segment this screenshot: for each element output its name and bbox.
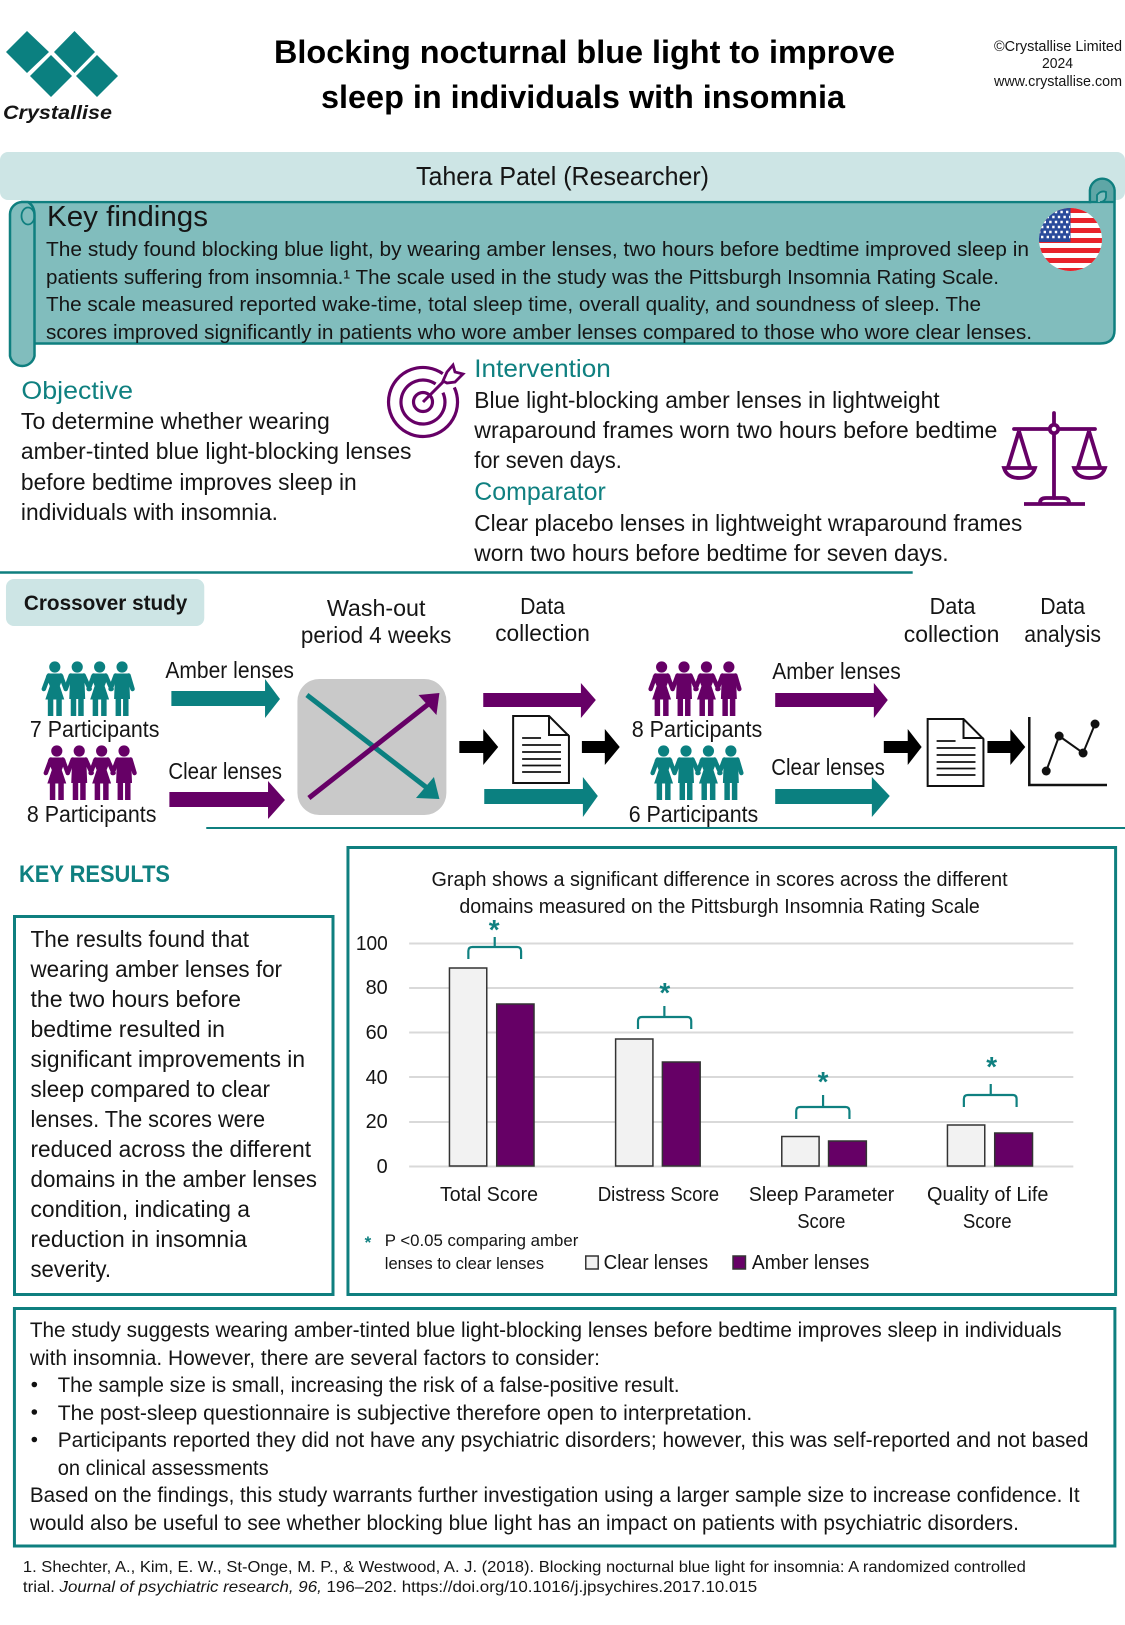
label: data collection 2	[904, 593, 999, 647]
intervention text: for seven days.	[474, 447, 622, 473]
group: 6 participants	[629, 745, 758, 827]
label: wash-out period	[301, 595, 451, 648]
arrow: black 2	[582, 729, 620, 765]
title: Blocking nocturnal blue light to improve	[274, 34, 895, 70]
arrow: purple clear start	[169, 781, 285, 819]
chart title: domains measured on the Pittsburgh Insomnia Rating Scale	[459, 895, 980, 918]
logo diamonds	[6, 31, 118, 97]
heading: key results: KEY RESULTS	[19, 861, 170, 888]
significance note: lenses to clear lenses	[385, 1254, 544, 1273]
bars: sleep parameter score	[782, 1136, 866, 1166]
label: wash-out period: Wash-out	[327, 595, 426, 621]
copyright note: www.crystallise.com	[993, 74, 1122, 90]
objective heading: Objective	[21, 377, 133, 405]
reference: 1. Shechter, A., Kim, E. W., St-Onge, M. P., & Westwood, A. J. (2018). Blocking nocturnal blue light for insomnia: A randomized controlled	[23, 1559, 1026, 1576]
significance bracket: sleep parameter score	[796, 1066, 849, 1119]
category labels: Sleep Parameter	[749, 1183, 894, 1206]
panel: conclusion: Based on the findings, this study warrants further investigation using a larger sample size to increase confidence. It	[30, 1484, 1080, 1507]
objective text: before bedtime improves sleep in	[21, 469, 357, 495]
arrow: black 4	[987, 729, 1025, 765]
icon: US flag	[1038, 207, 1104, 273]
panel: conclusion: Participants reported they did not have any psychiatric disorders; however, this was self-reported and not based	[58, 1429, 1089, 1452]
title: sleep in individuals with insomnia	[321, 79, 845, 115]
copyright note: 2024	[1042, 56, 1073, 72]
category labels: Total Score	[440, 1183, 538, 1206]
icon: document 1	[513, 716, 569, 783]
panel: conclusion: The post-sleep questionnaire is subjective therefore open to interpretation.	[58, 1402, 752, 1425]
comparator text	[473, 510, 1022, 566]
icon: document 2	[928, 719, 983, 786]
panel: conclusion	[14, 1308, 1115, 1546]
label: data collection 1: Data	[520, 593, 565, 619]
panel: key results text: lenses. The scores were	[30, 1106, 265, 1132]
category labels: Quality of Life	[927, 1183, 1048, 1206]
key findings heading: Key findings	[47, 201, 208, 233]
key findings text: The study found blocking blue light, by wearing amber lenses, two hours before bedtime improved sleep in	[46, 238, 1029, 261]
category labels: Distress Score	[598, 1183, 719, 1206]
crossover box	[297, 679, 446, 815]
label: data collection 1: collection	[495, 620, 590, 646]
icon: balance scales	[1004, 413, 1105, 504]
icon: line chart	[1029, 717, 1107, 785]
label: data collection 2: collection	[904, 621, 999, 647]
significance note	[365, 1231, 579, 1273]
scroll left curl	[22, 208, 34, 224]
label: data analysis	[1024, 593, 1101, 647]
panel: key results text: reduction in insomnia	[30, 1226, 247, 1252]
panel: key results text: significant improvements in	[30, 1046, 305, 1072]
key findings text: patients suffering from insomnia.¹ The scale used in the study was the Pittsburgh Insomnia Rating Scale.	[46, 266, 999, 289]
category labels: Score	[797, 1210, 845, 1233]
icon: target with arrow	[389, 365, 463, 436]
scroll body	[22, 179, 1114, 344]
significance note: *	[365, 1233, 372, 1252]
significance bracket: sleep parameter score: *	[818, 1066, 829, 1097]
panel: key results text: domains in the amber lenses	[30, 1166, 317, 1192]
group: 8 participants second period	[632, 661, 762, 742]
copyright note: ©Crystallise Limited	[994, 39, 1122, 55]
researcher band: Tahera Patel (Researcher)	[416, 161, 709, 191]
title	[274, 34, 895, 115]
bars: distress score	[616, 1039, 700, 1166]
arrow: black 3	[884, 729, 922, 765]
y axis labels	[356, 933, 388, 1178]
significance bracket: distress score: *	[659, 977, 670, 1008]
arrow: purple second period	[775, 683, 888, 718]
objective text: amber-tinted blue light-blocking lenses	[21, 438, 412, 464]
y axis labels: 80	[366, 977, 388, 999]
panel: key results text: the two hours before	[30, 986, 241, 1012]
researcher band	[0, 152, 1125, 200]
y axis labels: 0	[377, 1156, 388, 1178]
label: data collection 1	[495, 593, 590, 646]
logo: Crystallise	[3, 31, 118, 124]
label: data collection 2: Data	[930, 593, 976, 619]
panel: key results text: wearing amber lenses for	[30, 956, 282, 982]
heading: crossover study	[6, 579, 204, 626]
panel: bar chart	[348, 848, 1116, 1294]
intervention text: Blue light-blocking amber lenses in lightweight	[474, 387, 940, 413]
copyright note	[993, 39, 1122, 90]
group: 7 participants	[30, 661, 159, 742]
objective text: individuals with insomnia.	[21, 499, 278, 525]
significance note: P <0.05 comparing amber	[385, 1231, 579, 1250]
comparator heading: Comparator	[474, 478, 606, 506]
panel: key results text: bedtime resulted in	[30, 1016, 225, 1042]
panel: objective	[21, 377, 412, 525]
label: clear lenses 1: Clear lenses	[168, 758, 282, 784]
panel: conclusion: on clinical assessments	[58, 1457, 269, 1480]
panel: comparator	[473, 478, 1022, 566]
reference	[23, 1559, 1026, 1596]
panel: conclusion: with insomnia. However, there are several factors to consider:	[29, 1347, 600, 1370]
significance bracket: distress score	[638, 977, 691, 1029]
arrow: teal second period	[775, 777, 890, 817]
panel: conclusion: The study suggests wearing amber-tinted blue light-blocking lenses before bedtime improves sleep in individuals	[30, 1319, 1062, 1342]
category labels	[440, 1183, 1048, 1233]
arrow: purple crossing	[309, 693, 439, 798]
scroll right curl	[1090, 179, 1114, 202]
label: data analysis: analysis	[1024, 621, 1101, 647]
y axis labels: 20	[366, 1111, 388, 1133]
scroll left roll	[10, 202, 34, 366]
label: clear lenses 2: Clear lenses	[771, 754, 885, 780]
key findings text	[46, 238, 1032, 344]
bars: quality of life score	[947, 1125, 1033, 1166]
panel: key results text: condition, indicating a	[30, 1196, 250, 1222]
panel: key results text: reduced across the different	[30, 1136, 312, 1162]
objective text: To determine whether wearing	[21, 408, 330, 434]
chart title: Graph shows a significant difference in scores across the different	[432, 868, 1008, 891]
reference: trial. Journal of psychiatric research, 96, 196–202. https://doi.org/10.1016/j.jpsychires.2017.10.015	[23, 1579, 757, 1596]
panel: conclusion: The sample size is small, increasing the risk of a false-positive result.	[58, 1374, 680, 1397]
significance bracket: total score: *	[489, 914, 500, 945]
logo wordmark: Crystallise	[3, 103, 112, 124]
panel: key results text: The results found that	[30, 926, 250, 952]
arrow: teal after washout	[484, 777, 598, 817]
intervention text	[473, 387, 997, 473]
panel: conclusion: would also be useful to see whether blocking blue light has an impact on patients with psychiatric disorders.	[29, 1512, 1019, 1535]
category labels: Score	[963, 1210, 1012, 1233]
legend: amber lenses: Amber lenses	[752, 1251, 869, 1274]
arrow: teal amber start	[171, 679, 280, 718]
label: wash-out period: period 4 weeks	[301, 622, 451, 648]
group: 8 participants second period: 8 Participants	[632, 716, 762, 742]
significance bracket: quality of life score: *	[986, 1051, 997, 1082]
significance bracket: quality of life score	[964, 1051, 1017, 1107]
panel: intervention	[473, 355, 997, 473]
group: 8 participants first arm: 8 Participants	[27, 801, 156, 827]
arrow: black 1	[459, 729, 498, 765]
panel: key results text: severity.	[30, 1256, 111, 1282]
chart title	[432, 868, 1008, 918]
intervention text: wraparound frames worn two hours before bedtime	[473, 417, 997, 443]
y axis labels: 60	[366, 1022, 388, 1044]
arrow: teal crossing	[307, 695, 439, 799]
group: 7 participants: 7 Participants	[30, 716, 159, 742]
comparator text: Clear placebo lenses in lightweight wraparound frames	[474, 510, 1022, 536]
arrow: purple after washout	[483, 683, 596, 718]
heading: crossover study: Crossover study	[24, 592, 188, 615]
label: amber lenses 2: Amber lenses	[772, 658, 901, 684]
bars: total score	[449, 968, 534, 1166]
panel: key results text	[14, 916, 333, 1294]
group: 8 participants first arm	[27, 745, 156, 827]
objective text	[21, 408, 412, 525]
intervention heading: Intervention	[474, 355, 611, 383]
label: data analysis: Data	[1040, 593, 1085, 619]
significance bracket: total score	[468, 914, 521, 959]
key findings text: scores improved significantly in patients who wore amber lenses compared to those who wore clear lenses.	[46, 321, 1032, 344]
label: amber lenses 1: Amber lenses	[165, 657, 294, 683]
y axis labels: 100	[356, 933, 388, 955]
y axis labels: 40	[366, 1067, 388, 1089]
comparator text: worn two hours before bedtime for seven days.	[473, 540, 949, 566]
key findings text: The scale measured reported wake-time, total sleep time, overall quality, and soundness of sleep. The	[46, 293, 981, 316]
legend: clear lenses: Clear lenses	[604, 1251, 708, 1274]
panel: key results text: sleep compared to clear	[30, 1076, 270, 1102]
group: 6 participants: 6 Participants	[629, 801, 758, 827]
panel: key findings scroll	[10, 179, 1114, 366]
